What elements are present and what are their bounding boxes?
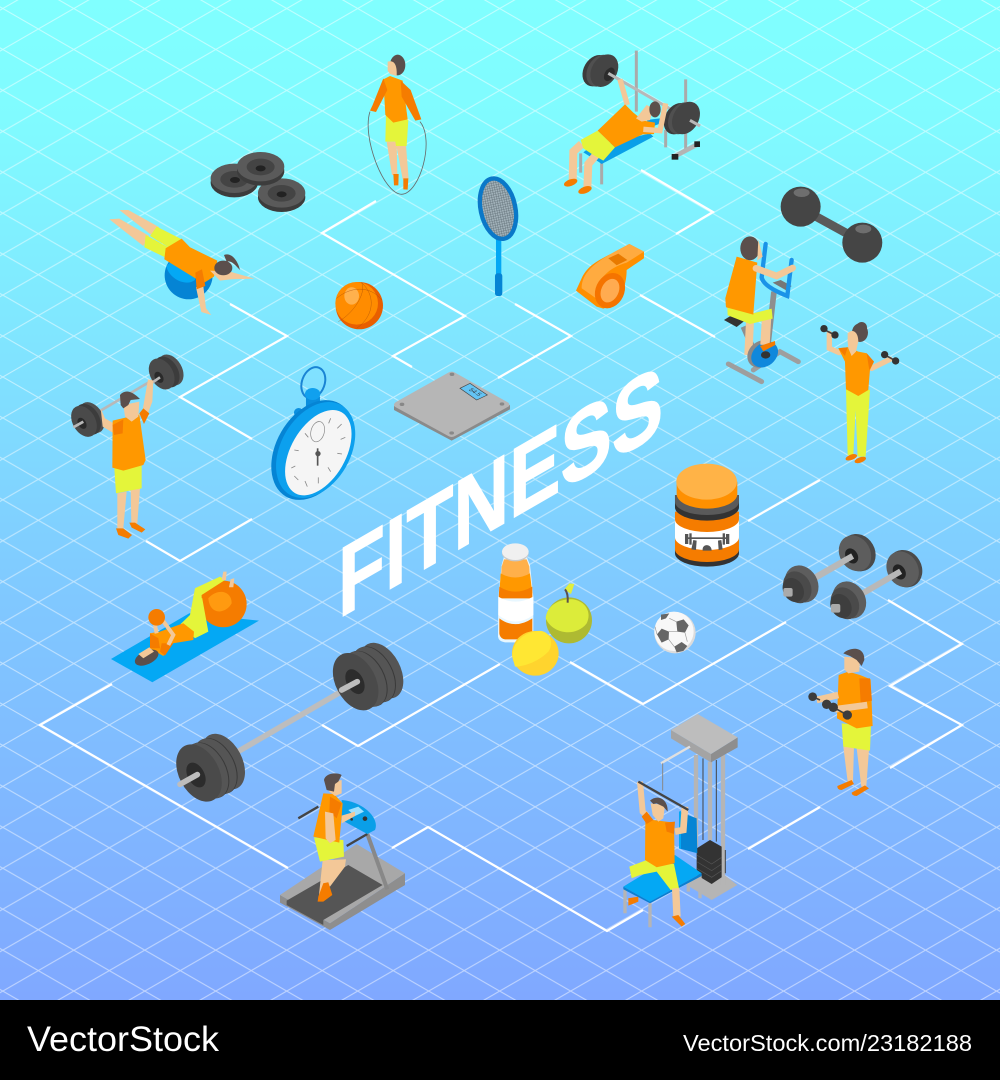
person on exercise bike bbox=[724, 236, 798, 382]
person on treadmill bbox=[280, 773, 405, 930]
footer logo text: VectorStock bbox=[27, 1020, 220, 1059]
person doing dumbbell curls bbox=[808, 649, 873, 796]
person on bench press bbox=[563, 49, 706, 196]
title: FITNESS: FITNESS bbox=[338, 342, 663, 640]
person jumping rope bbox=[368, 55, 426, 194]
icon: pair of dumbbells bbox=[777, 528, 929, 625]
person on mat with medicine ball bbox=[111, 572, 259, 682]
person lifting barbell overhead bbox=[66, 350, 189, 539]
icon: bathroom scale bbox=[394, 372, 510, 441]
icon: bathroom scale: 54.5 bbox=[467, 387, 483, 398]
icon: stopwatch bbox=[254, 364, 371, 515]
footer image id text: VectorStock.com/23182188 bbox=[683, 1030, 972, 1056]
icon: whistle bbox=[576, 244, 644, 313]
icon: lemon bbox=[512, 631, 559, 676]
cable pulldown machine with person bbox=[623, 714, 738, 927]
connector lines bbox=[40, 170, 962, 931]
icon: badminton racket bbox=[475, 175, 521, 296]
icon: round dumbbell bbox=[781, 187, 882, 263]
icon: supplement jar bbox=[675, 464, 739, 567]
icon: weight plates bbox=[211, 152, 305, 212]
person on exercise ball bbox=[109, 210, 255, 315]
person with raised dumbbells bbox=[820, 322, 899, 465]
icon: soccer ball bbox=[654, 612, 696, 653]
icon: apple bbox=[546, 583, 592, 643]
footer bar bbox=[0, 1000, 1000, 1080]
icon: juice bottle bbox=[498, 543, 533, 642]
icon: large barbell bbox=[167, 635, 412, 809]
icon: basketball bbox=[335, 282, 383, 329]
